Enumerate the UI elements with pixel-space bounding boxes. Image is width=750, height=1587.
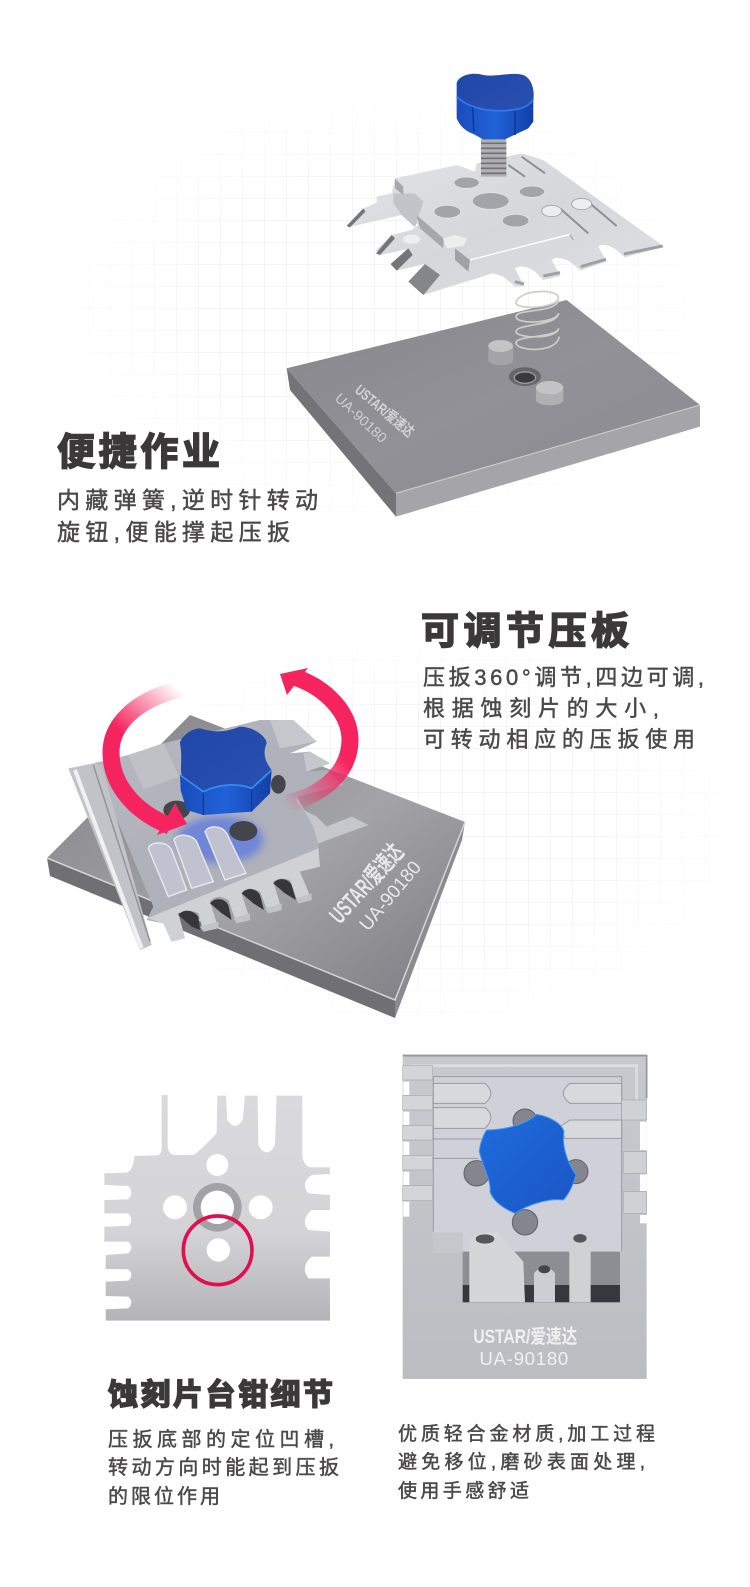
text: convenient operation: 旋钮,便能撑起压扳 [57,519,290,545]
lower recess [433,1232,620,1302]
text: positioning groove: 压扳底部的定位凹槽, [108,1428,334,1451]
blue knob [457,74,534,139]
plate front highlight and tooth ends [470,234,570,260]
plate holes [434,177,545,227]
blue reflection [177,817,263,863]
heading: 可调节压板: 可调节压板 [421,611,629,653]
side rail [68,763,152,950]
base model number: UA-90180 [332,390,391,446]
plate outline [104,1095,330,1321]
exploded product photo: vise [287,74,700,517]
text: material: 优质轻合金材质,加工过程 [398,1423,655,1445]
holes [163,1154,273,1262]
vise model number: UA-90180 [479,1348,568,1369]
screw thread [481,138,506,177]
right fingers [622,1100,647,1213]
text: material [398,1423,655,1502]
plate silhouette [347,153,664,295]
base plate [287,291,700,517]
slot grooves [508,157,617,233]
slots [148,827,246,897]
blue knob [479,1114,576,1213]
photo: clamp plate underside [104,1095,330,1321]
text: adjustable clamp: 可转动相应的压扳使用 [423,727,695,752]
dimples [464,1109,588,1235]
spring [516,291,559,349]
assembled product photo: vise with rotation arrows [47,668,465,1018]
base logo: USTAR/爱速达 [324,839,409,929]
rotation arrow: right [280,668,350,803]
upper clamp plate [347,153,664,295]
vise logo: USTAR/爱速达 [473,1326,577,1348]
text: positioning groove: 转动方向时能起到压扳 [108,1456,339,1479]
inner slots [433,1083,622,1138]
right finger highlights [640,1122,647,1223]
red highlight circle [183,1216,252,1285]
front bevel strip [147,848,320,942]
text: convenient operation: 内藏弹簧,逆时针转动 [57,487,318,513]
slot ends [542,198,592,217]
top-left finger [128,743,179,789]
heading: 便捷作业: 便捷作业 [57,432,220,474]
text: material: 使用手感舒适 [398,1480,529,1502]
text: convenient operation [57,487,318,545]
left scoop and raised step side [393,193,423,227]
background grid: middle [220,663,689,997]
text: adjustable clamp: 压扳360°调节,四边可调, [423,665,704,690]
plate body [403,1054,647,1379]
text: adjustable clamp [423,665,704,752]
photo: assembled vise top view [403,1054,647,1379]
text: material: 避免移位,磨砂表面处理, [398,1451,645,1473]
plate body [93,720,368,942]
text: positioning groove: 的限位作用 [108,1485,220,1508]
plate holes [163,775,286,841]
front teeth gaps [178,879,296,930]
rotation arrow: left [111,689,187,835]
heading: 蚀刻片台钳细节: 蚀刻片台钳细节 [108,1378,333,1412]
base plate [47,715,465,1018]
background grid: top [116,122,654,497]
clamp plate [93,720,368,942]
left fingers [403,1066,433,1201]
pegs and threaded hole [488,340,563,405]
text: positioning groove [108,1428,339,1508]
lighter finger tips [270,720,368,843]
left finger highlights [403,1082,409,1217]
chamfered prong tips [347,208,365,227]
blue knob [180,727,272,815]
inner clamp [433,1077,622,1252]
tooth faces [200,893,312,932]
base logo: USTAR/爱速达 [351,382,417,441]
base model number: UA-90180 [356,857,426,935]
text: adjustable clamp: 根据蚀刻片的大小, [423,696,659,721]
